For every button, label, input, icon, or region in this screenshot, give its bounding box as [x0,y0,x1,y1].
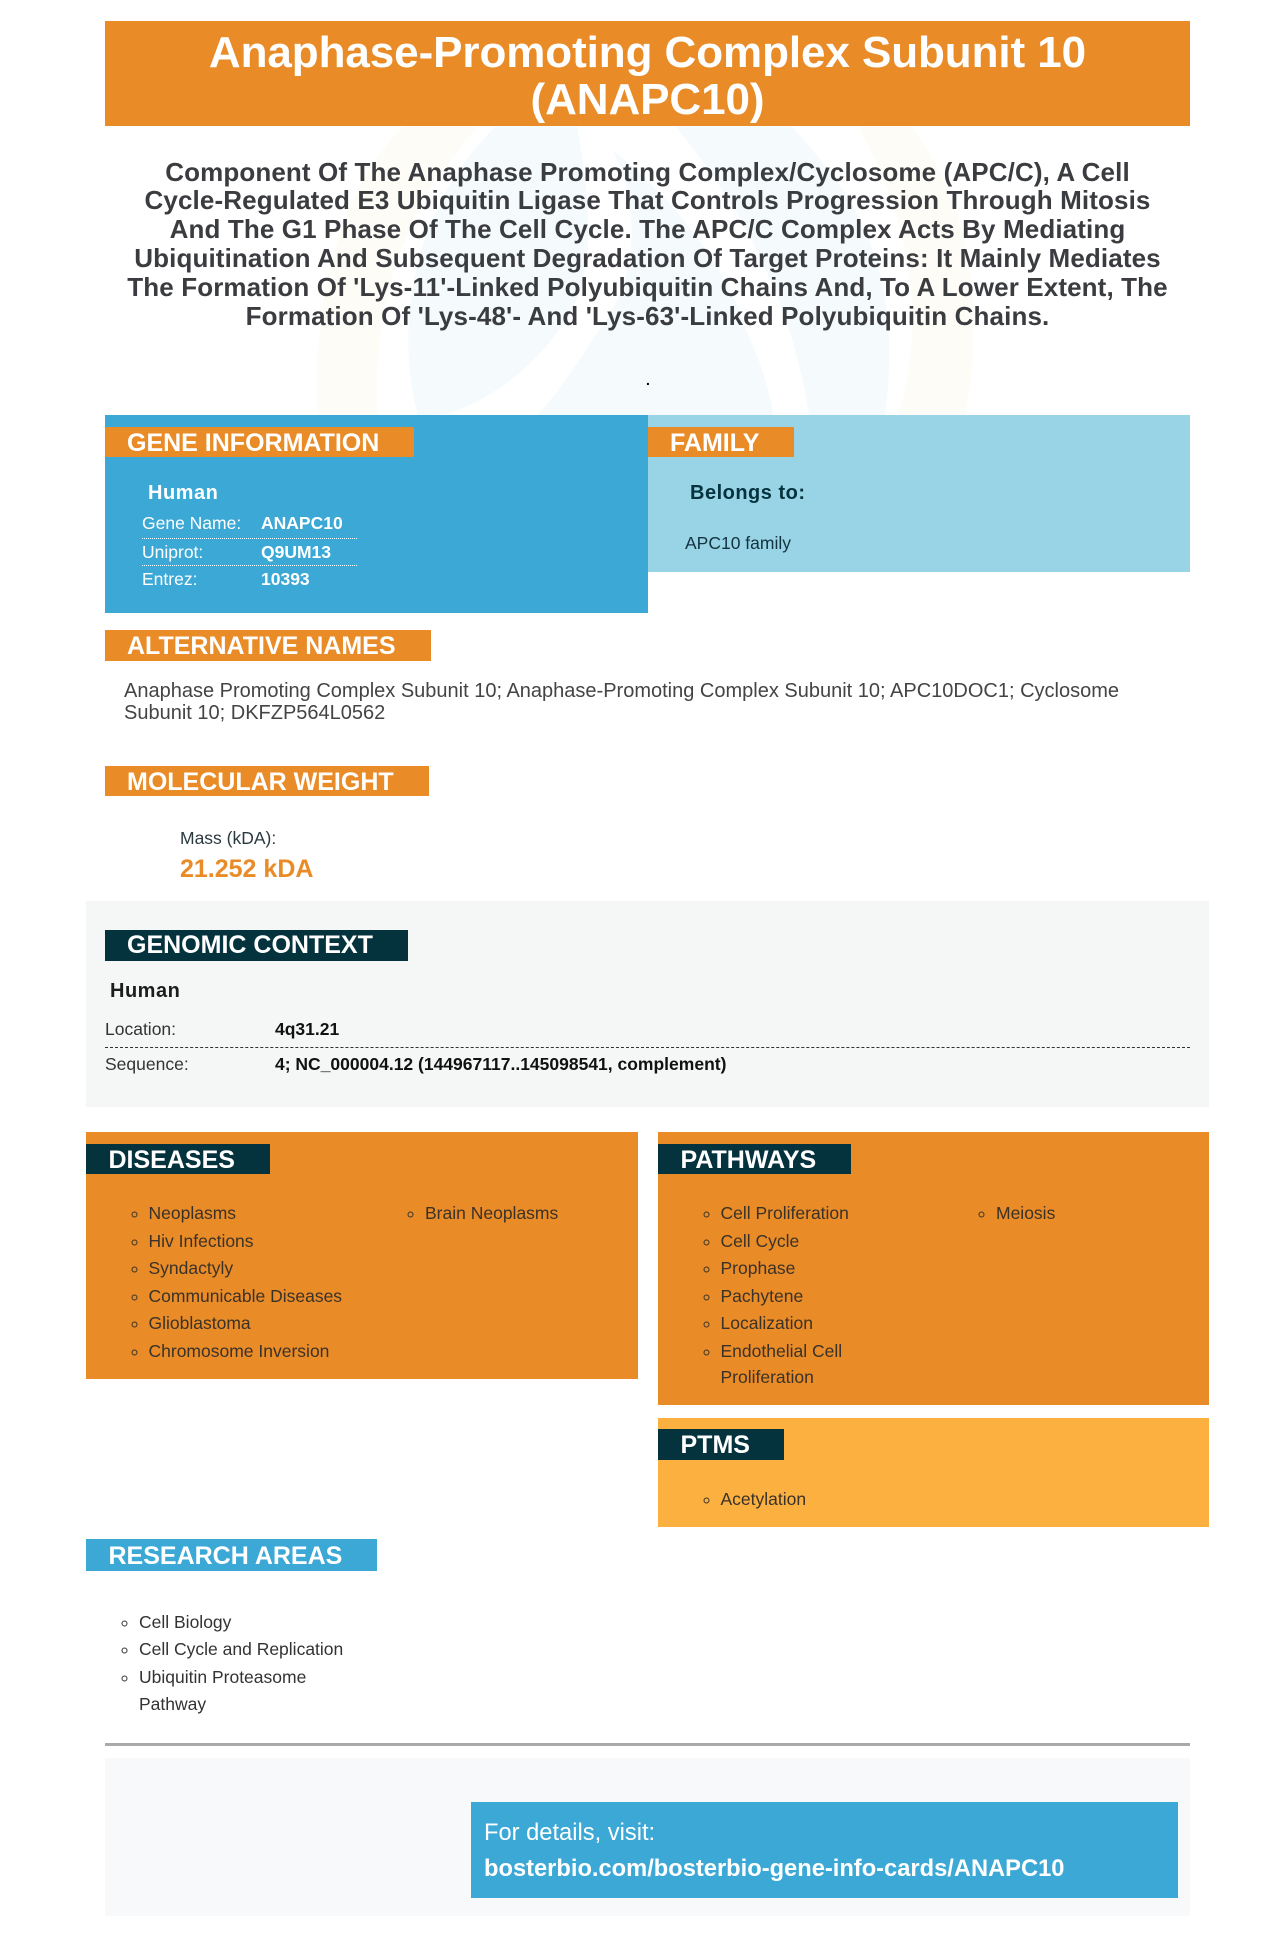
gene name row [142,511,357,539]
protein description: Ubiquitination And Subsequent Degradation Of Target Proteins: It Mainly Mediates [134,243,1161,273]
heading: alternative names: ALTERNATIVE NAMES [127,632,396,660]
pathways list column 1: Prophase [720,1258,795,1278]
panel: genomic context [86,901,1209,1107]
background watermark logo [318,126,974,415]
uniprot row: Q9UM13 [261,542,331,562]
heading: diseases: DISEASES [108,1146,235,1174]
diseases list column 1: Chromosome Inversion [148,1341,329,1361]
diseases list column 2: Brain Neoplasms [425,1203,558,1223]
alternative names text: Subunit 10; DKFZP564L0562 [124,702,385,724]
diseases list column 1: Glioblastoma [148,1313,251,1333]
heading: gene information: GENE INFORMATION [127,429,379,457]
heading: genomic context: GENOMIC CONTEXT [127,931,373,959]
diseases list column 1 [132,1203,342,1361]
diseases list column 1: Communicable Diseases [148,1286,342,1306]
pathways list column 1: Pachytene [720,1286,803,1306]
family name: APC10 family [685,533,791,553]
protein description: Formation Of 'Lys-48'- And 'Lys-63'-Linked Polyubiquitin Chains. [246,301,1049,331]
heading: ptms [658,1429,784,1460]
title banner: Anaphase-Promoting Complex Subunit 10 [209,28,1086,77]
uniprot row [142,540,357,566]
species label: Human [110,980,180,1002]
protein description: The Formation Of 'Lys-11'-Linked Polyubiquitin Chains And, To A Lower Extent, The [127,272,1168,302]
ptms list: Acetylation [720,1489,806,1509]
pathways list column 1: Localization [720,1313,813,1333]
heading: ptms: PTMS [680,1431,750,1459]
protein description: And The G1 Phase Of The Cell Cycle. The APC/C Complex Acts By Mediating [170,214,1125,244]
heading: molecular weight: MOLECULAR WEIGHT [127,768,394,796]
research areas list: Cell Biology [139,1612,231,1632]
protein description: Cycle-Regulated E3 Ubiquitin Ligase That Controls Progression Through Mitosis [144,185,1150,215]
small period mark: . [646,372,650,388]
panel: family [648,415,1190,572]
pathways list column 2: Meiosis [996,1203,1055,1223]
alternative names text [124,680,1119,724]
belongs to label: Belongs to: [690,482,806,504]
research areas list: Pathway [139,1694,206,1714]
heading: pathways [658,1144,851,1174]
panel: pathways [658,1132,1209,1405]
heading: family: FAMILY [670,429,759,457]
location row [105,1017,1190,1048]
heading: diseases [86,1144,270,1174]
heading: family [648,427,794,457]
research areas list: Ubiquitin Proteasome [139,1667,306,1687]
species label: Human [148,482,218,504]
protein description: Component Of The Anaphase Promoting Complex/Cyclosome (APC/C), A Cell [165,157,1130,187]
mass value: 21.252 kDA [180,855,313,883]
entrez row [142,569,310,589]
pathways list column 1: Cell Proliferation [720,1203,849,1223]
sequence row: Sequence: [105,1054,189,1074]
details url: bosterbio.com/bosterbio-gene-info-cards/ANAPC10 [484,1856,1064,1882]
panel: ptms [658,1418,1209,1527]
gene name row: Gene Name: [142,513,241,533]
callout: details link [471,1802,1178,1898]
diseases list column 1: Syndactyly [148,1258,233,1278]
entrez row: 10393 [261,569,310,589]
details label: For details, visit: [484,1820,655,1846]
heading: pathways: PATHWAYS [680,1146,816,1174]
mass label: Mass (kDA): [180,828,276,848]
entrez row: Entrez: [142,569,197,589]
panel: diseases [86,1132,638,1379]
title banner [105,21,1190,126]
pathways list column 1 [704,1203,849,1387]
research areas list: Cell Cycle and Replication [139,1639,343,1659]
heading: research areas: RESEARCH AREAS [108,1542,342,1570]
pathways list column 1: Proliferation [720,1367,814,1387]
sequence row: 4; NC_000004.12 (144967117..145098541, complement) [275,1054,726,1074]
alternative names text: Anaphase Promoting Complex Subunit 10; Anaphase-Promoting Complex Subunit 10; APC10DOC1; Cyclosome [124,680,1119,702]
title banner: (ANAPC10) [530,75,764,124]
uniprot row: Uniprot: [142,542,203,562]
panel: footer [105,1758,1190,1916]
research areas list [122,1612,343,1714]
diseases list column 1: Hiv Infections [148,1231,254,1251]
pathways list column 1: Cell Cycle [720,1231,799,1251]
diseases list column 1: Neoplasms [148,1203,236,1223]
panel: gene information [105,415,648,613]
protein description [127,157,1168,331]
pathways list column 1: Endothelial Cell [720,1341,842,1361]
location row: Location: [105,1019,176,1039]
gene name row: ANAPC10 [261,513,343,533]
location row: 4q31.21 [275,1019,339,1039]
